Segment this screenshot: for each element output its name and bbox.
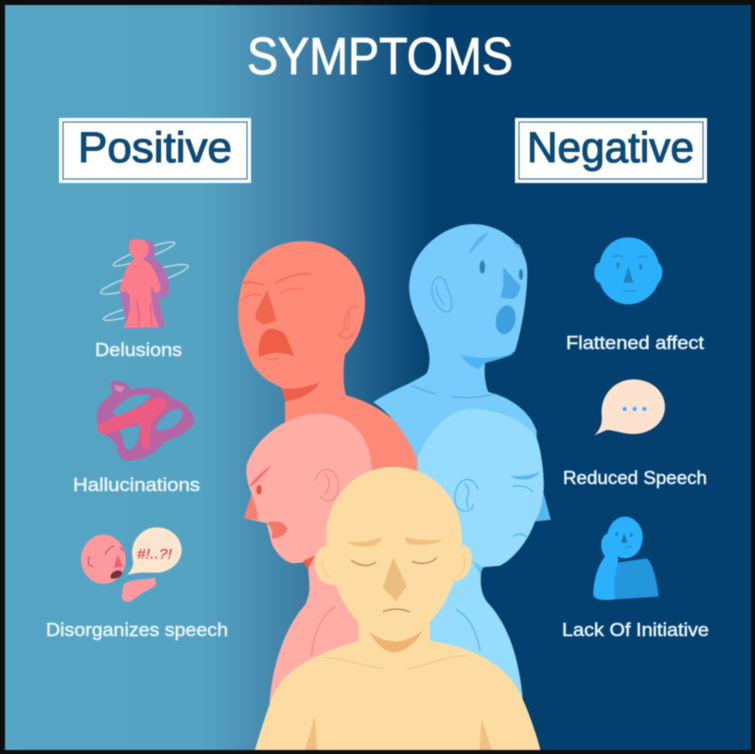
heading: Positive: Positive — [78, 124, 232, 172]
hand — [122, 577, 156, 602]
speech bubble — [127, 527, 182, 575]
figure: pink side-profile head — [244, 413, 377, 707]
heading: Positive — [59, 118, 251, 183]
label: Lack Of Initiative: Lack Of Initiative — [562, 619, 709, 640]
icon: hallucinations brain — [97, 381, 194, 461]
icon: reduced speech bubble — [594, 379, 665, 435]
icon: delusions figure — [99, 238, 190, 329]
heading: Negative — [515, 118, 707, 183]
label: Hallucinations: Hallucinations — [73, 474, 200, 495]
label: Delusions: Delusions — [95, 339, 182, 360]
title: SYMPTOMS — [247, 28, 513, 86]
figure: calm yellow front head — [253, 467, 542, 754]
label: Disorganizes speech: Disorganizes speech — [46, 619, 228, 640]
icon: lack of initiative person — [593, 517, 659, 600]
icon: flattened affect face — [594, 237, 662, 304]
figure: angry red head — [238, 241, 418, 492]
heading: Negative: Negative — [527, 124, 694, 172]
figure: sad light-blue head — [417, 409, 551, 707]
label: Flattened affect: Flattened affect — [566, 332, 704, 353]
central figures — [238, 224, 551, 754]
icon: disorganized speech: #!..?! — [137, 545, 172, 561]
label: Reduced Speech: Reduced Speech — [563, 467, 707, 488]
figure: worried blue head — [373, 224, 537, 465]
icon: disorganized speech — [81, 527, 182, 602]
face — [81, 535, 126, 584]
